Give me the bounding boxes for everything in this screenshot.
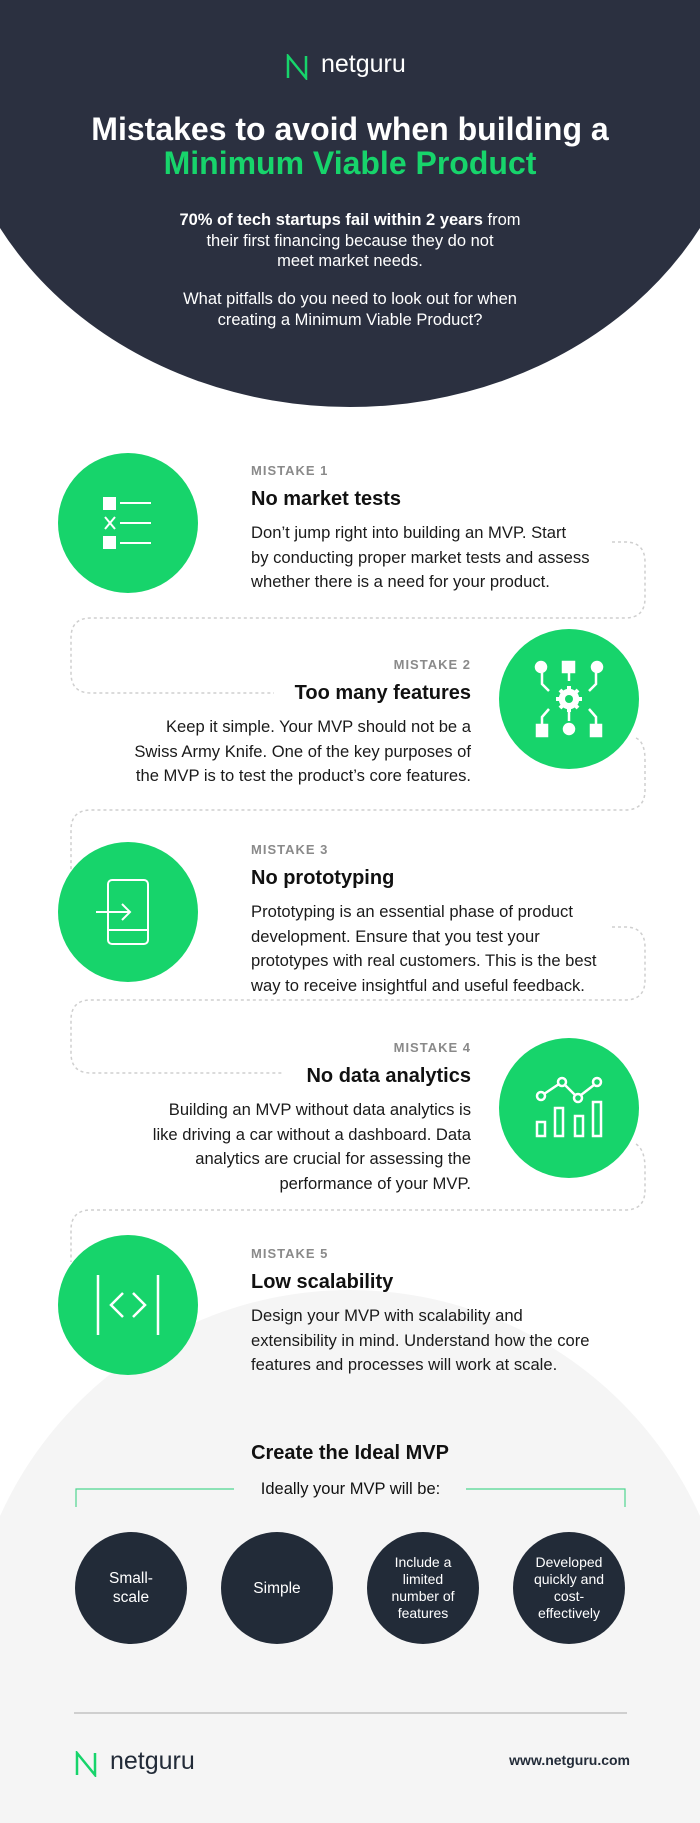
icon: features gear bbox=[499, 629, 639, 769]
circle: quick and cost-effective: cost- bbox=[554, 1588, 584, 1604]
circle: small-scale: Small- bbox=[109, 1570, 153, 1587]
mistake 2 text bbox=[134, 657, 471, 785]
icon: analytics bbox=[499, 1038, 639, 1178]
footer logo bbox=[76, 1747, 195, 1777]
mistake 1 text: whether there is a need for your product. bbox=[251, 572, 550, 591]
mistake 4 text bbox=[153, 1040, 471, 1192]
title: Mistakes to avoid when building a bbox=[91, 111, 609, 147]
mistake 1 text bbox=[251, 463, 590, 591]
mistake 3 text bbox=[251, 842, 597, 994]
mistake 3 text: Prototyping is an essential phase of product bbox=[251, 902, 573, 921]
mistake 5 text: features and processes will work at scale. bbox=[251, 1355, 557, 1374]
mistake 1 text: by conducting proper market tests and assess bbox=[251, 548, 590, 566]
mistake 3 text: MISTAKE 3 bbox=[251, 842, 328, 857]
mistake 4 text: analytics are crucial for assessing the bbox=[195, 1149, 471, 1168]
circle: limited features: features bbox=[398, 1605, 448, 1621]
circle: limited features: number of bbox=[391, 1588, 455, 1604]
title: Minimum Viable Product bbox=[164, 145, 536, 181]
mistake 2 text: Too many features bbox=[295, 682, 471, 704]
logo top bbox=[286, 50, 406, 80]
intro question: creating a Minimum Viable Product? bbox=[218, 310, 482, 328]
heading: create ideal MVP: Create the Ideal MVP bbox=[251, 1442, 449, 1464]
mistake 5 text bbox=[251, 1246, 590, 1374]
mistake 3 text: No prototyping bbox=[251, 867, 394, 889]
mistake 3 text: way to receive insightful and useful feedback. bbox=[251, 976, 585, 994]
mistake 3 text: development. Ensure that you test your bbox=[251, 926, 540, 946]
circle: limited features bbox=[367, 1532, 479, 1644]
intro stat: 70% of tech startups fail within 2 years from bbox=[179, 211, 521, 229]
mistake 5 text: Low scalability bbox=[251, 1271, 393, 1293]
circle: quick and cost-effective bbox=[513, 1532, 625, 1644]
icon: scalability code bbox=[58, 1235, 198, 1375]
icon: prototype phone bbox=[58, 842, 198, 982]
mistake 2 text: MISTAKE 2 bbox=[394, 657, 471, 672]
intro stat: meet market needs. bbox=[277, 252, 423, 270]
circle: quick and cost-effective: Developed bbox=[536, 1554, 602, 1570]
ideal circles bbox=[75, 1532, 625, 1644]
title bbox=[91, 111, 609, 181]
bracket with subheading bbox=[75, 1480, 626, 1507]
footer logo: netguru bbox=[110, 1747, 195, 1775]
intro question bbox=[183, 290, 517, 328]
mistake 5 text: MISTAKE 5 bbox=[251, 1246, 328, 1261]
bracket with subheading: Ideally your MVP will be: bbox=[261, 1480, 440, 1498]
footer url: www.netguru.com bbox=[509, 1752, 630, 1768]
intro stat: their first financing because they do not bbox=[206, 232, 494, 250]
mistake 5 text: Design your MVP with scalability and bbox=[251, 1306, 523, 1325]
mistake 2 text: the MVP is to test the product’s core features. bbox=[136, 766, 471, 785]
mistake 4 text: Building an MVP without data analytics is bbox=[169, 1100, 471, 1119]
circle: limited features: Include a bbox=[395, 1554, 451, 1570]
mistake 4 text: like driving a car without a dashboard. Data bbox=[153, 1124, 471, 1144]
circle: simple: Simple bbox=[253, 1580, 301, 1596]
logo top: netguru bbox=[321, 50, 406, 78]
circle: simple bbox=[221, 1532, 333, 1644]
mistake 4 text: No data analytics bbox=[306, 1065, 471, 1087]
intro stat bbox=[179, 211, 521, 270]
circle: quick and cost-effective: effectively bbox=[538, 1605, 600, 1621]
mistake 4 text: performance of your MVP. bbox=[279, 1174, 471, 1192]
mistake 1 text: MISTAKE 1 bbox=[251, 463, 328, 478]
mistake 3 text: prototypes with real customers. This is the best bbox=[251, 951, 597, 970]
mistake 1 text: Don’t jump right into building an MVP. Start bbox=[251, 523, 566, 542]
circle: quick and cost-effective: quickly and bbox=[534, 1571, 604, 1587]
intro question: What pitfalls do you need to look out for when bbox=[183, 290, 517, 308]
circle: small-scale: scale bbox=[113, 1589, 149, 1606]
mistake 1 text: No market tests bbox=[251, 488, 401, 510]
mistake 2 text: Swiss Army Knife. One of the key purposes of bbox=[134, 742, 471, 760]
mistake 4 text: MISTAKE 4 bbox=[394, 1040, 471, 1055]
circle: limited features: limited bbox=[403, 1571, 443, 1587]
mistake 2 text: Keep it simple. Your MVP should not be a bbox=[166, 717, 471, 736]
mistake 5 text: extensibility in mind. Understand how the core bbox=[251, 1330, 590, 1350]
circle: small-scale bbox=[75, 1532, 187, 1644]
icon: checklist bbox=[58, 453, 198, 593]
